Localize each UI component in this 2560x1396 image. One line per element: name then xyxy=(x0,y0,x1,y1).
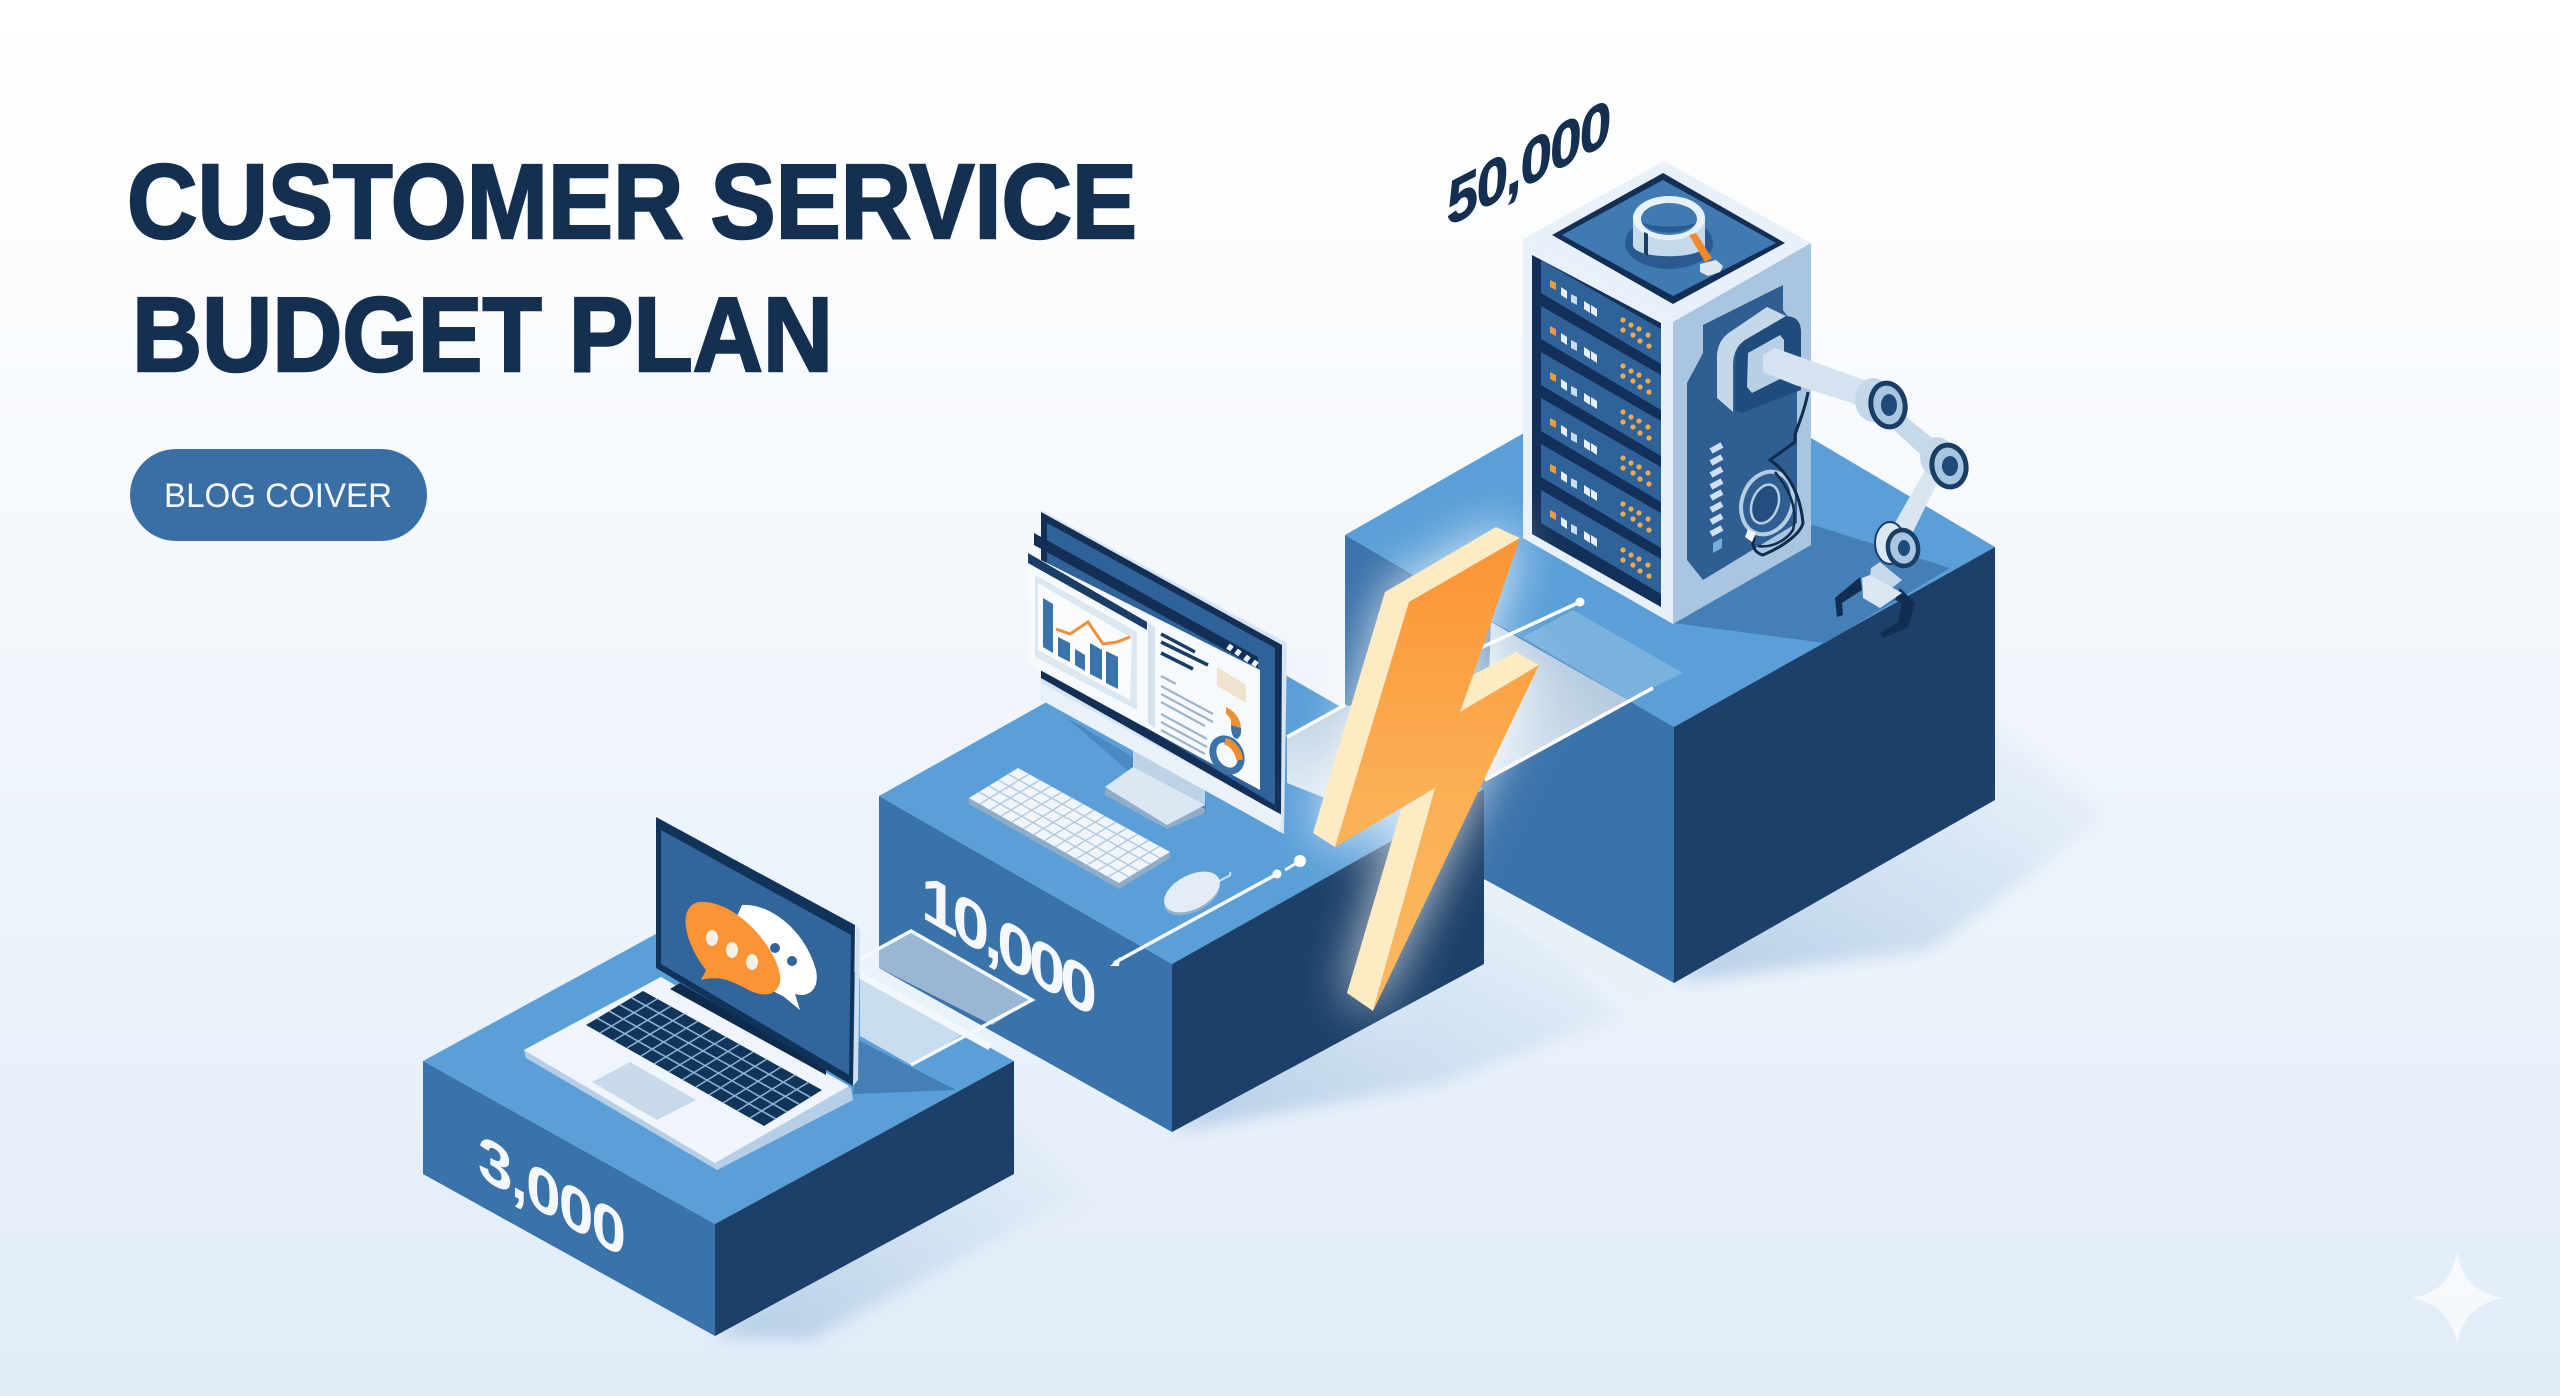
bolt glow xyxy=(1314,526,1539,1011)
thumbnail card xyxy=(1217,667,1246,703)
icon: desktop monitor with dashboard xyxy=(1027,510,1287,834)
server top xyxy=(1523,161,1811,322)
pale plate on top of block 2 behind bolt xyxy=(1287,704,1420,800)
title xyxy=(127,143,1137,394)
robot arm xyxy=(1763,348,1969,638)
block 1: small tier xyxy=(423,898,1014,1336)
arrow: block 2 dimension line xyxy=(1110,855,1306,966)
donut charts xyxy=(1207,707,1247,776)
bar chart panel xyxy=(1035,575,1137,710)
window controls xyxy=(1228,646,1257,665)
ground shadows under blocks xyxy=(715,720,2110,1340)
monitor body xyxy=(1041,510,1287,834)
server left face with racks xyxy=(1523,239,1673,624)
title: BUDGET PLAN xyxy=(132,276,833,394)
vents xyxy=(1711,445,1722,534)
monitor shadow on block 2 xyxy=(1067,718,1206,815)
icon: mouse xyxy=(1158,863,1230,924)
value: 10,000: 10,000 xyxy=(921,858,1097,1034)
icon: server rack with robot arm xyxy=(1442,88,1969,638)
laptop shadow on block 1 xyxy=(853,1040,956,1094)
value: 50,000: 50,000 xyxy=(1442,88,1614,239)
icon: desktop keyboard xyxy=(969,768,1170,889)
document text lines xyxy=(1161,634,1208,669)
server shadow on block 3 xyxy=(1673,525,1950,643)
block 2: medium tier xyxy=(879,621,1484,1132)
pale floor strip between block 2 and block 3 xyxy=(1484,881,1674,1005)
icon: laptop with chat bubbles xyxy=(524,817,860,1170)
connector: block 2 to block 3 xyxy=(1287,598,1683,780)
bolt face xyxy=(1335,538,1539,1011)
icon: sparkle watermark xyxy=(2412,1252,2503,1344)
monitor stand and foot xyxy=(1105,750,1205,829)
lightning bolt xyxy=(1313,526,1539,1011)
block 3: large tier xyxy=(1345,352,1995,983)
pill badge: blog cover: BLOG COIVER xyxy=(164,477,392,515)
title: CUSTOMER SERVICE xyxy=(127,143,1137,261)
server right face xyxy=(1673,243,1811,624)
bolt sides xyxy=(1313,527,1520,847)
pill badge: blog cover xyxy=(130,449,427,541)
connector: block 1 to block 2 xyxy=(858,931,1032,1065)
value: 3,000: 3,000 xyxy=(478,1121,626,1273)
cables xyxy=(1733,464,1801,542)
dashboard window xyxy=(1034,533,1258,668)
